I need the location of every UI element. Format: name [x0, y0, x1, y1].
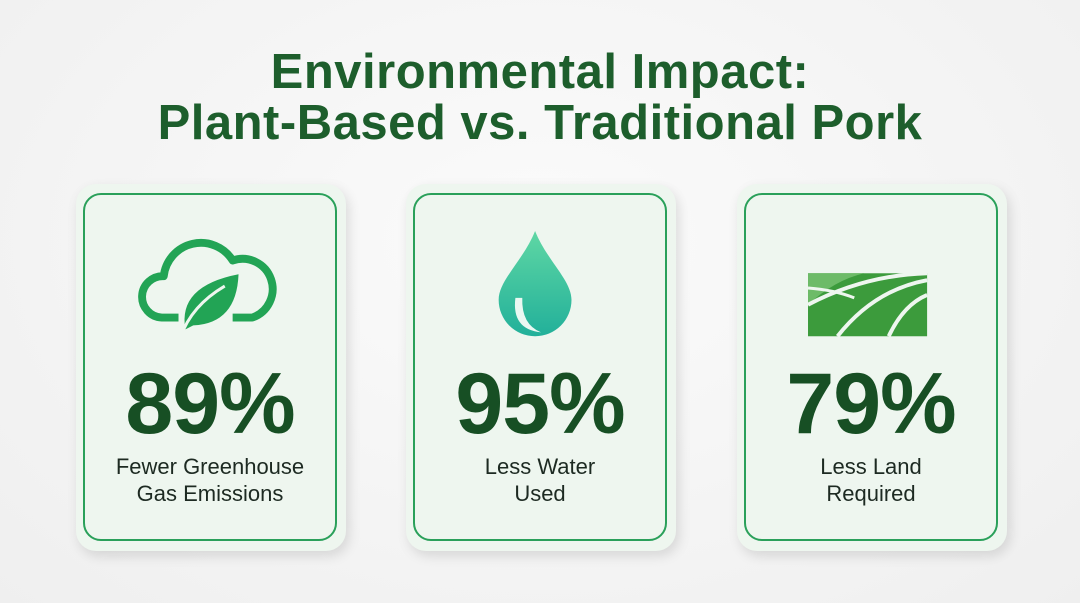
- icon: fields: [808, 273, 928, 336]
- panel: water: [406, 184, 676, 551]
- label: Less Water: [485, 454, 595, 479]
- stat 89%: 89%: [125, 356, 295, 452]
- stat 95%: 95%: [455, 356, 625, 452]
- panel: land: [737, 184, 1007, 551]
- panel: greenhouse: [76, 184, 346, 551]
- icon: water drop: [498, 231, 572, 336]
- title: Environmental Impact:: [271, 45, 809, 99]
- label: [820, 454, 922, 506]
- label: Gas Emissions: [137, 481, 283, 506]
- label: [485, 454, 595, 506]
- label: Required: [826, 481, 916, 506]
- label: Used: [514, 481, 566, 506]
- stat 79%: 79%: [786, 356, 956, 452]
- label: Less Land: [820, 454, 922, 479]
- title: Plant-Based vs. Traditional Pork: [158, 96, 922, 150]
- label: [116, 454, 304, 506]
- icon: cloud leaf: [138, 238, 277, 330]
- title: [158, 45, 922, 150]
- label: Fewer Greenhouse: [116, 454, 304, 479]
